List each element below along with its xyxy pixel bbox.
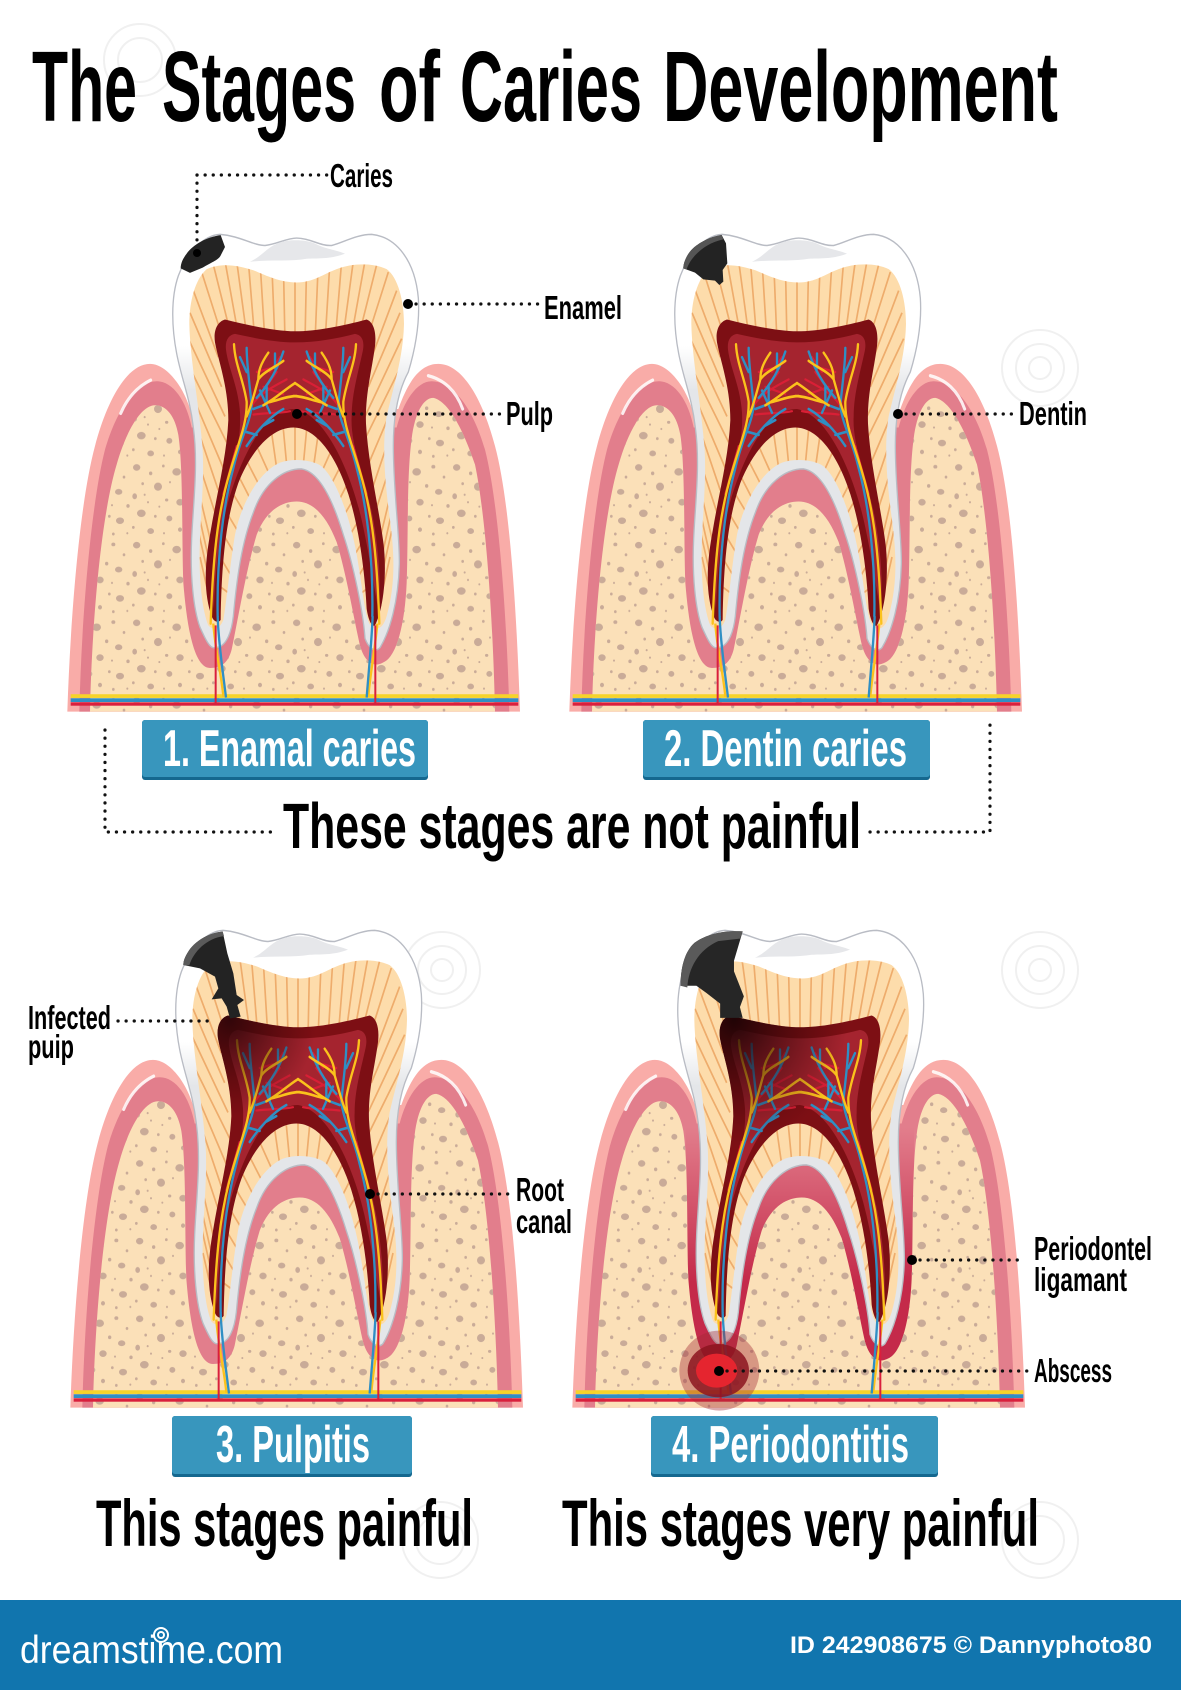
caries stage 4 bbox=[681, 931, 744, 1018]
label: infected pulp bbox=[28, 999, 213, 1065]
title: of bbox=[379, 31, 440, 143]
panel: stage 3 tooth bbox=[70, 930, 523, 1408]
caries stage 2 bbox=[683, 235, 727, 285]
title: Stages bbox=[162, 31, 356, 143]
label: enamel: Enamel bbox=[544, 289, 622, 326]
footer credit: ID 242908675 © Dannyphoto80 bbox=[790, 1632, 1152, 1659]
title: The bbox=[32, 31, 137, 143]
label: infected pulp: puip bbox=[28, 1028, 74, 1065]
abscess bbox=[679, 1331, 759, 1411]
stage label 1: 1. Enamal caries bbox=[163, 720, 416, 778]
bracket and caption: not painful: These stages are not painful bbox=[283, 790, 861, 862]
stage label 3 bbox=[172, 1416, 412, 1477]
label: pulp: Pulp bbox=[506, 395, 553, 432]
stage label 3: 3. Pulpitis bbox=[216, 1416, 370, 1474]
bracket and caption: not painful bbox=[105, 722, 990, 862]
stage label 1 bbox=[142, 720, 428, 780]
label: periodontal ligament: ligamant bbox=[1034, 1261, 1127, 1298]
caption: painful: This stages painful bbox=[96, 1486, 473, 1560]
stage label 2 bbox=[643, 720, 930, 780]
label: caries bbox=[193, 157, 393, 257]
label: root canal: canal bbox=[516, 1203, 572, 1240]
footer bar bbox=[0, 1600, 1181, 1690]
icon: footer spiral bbox=[154, 1628, 168, 1642]
label: caries: Caries bbox=[330, 157, 393, 194]
panel: stage 1 tooth bbox=[67, 234, 520, 712]
label: periodontal ligament bbox=[907, 1230, 1152, 1298]
label: dentin: Dentin bbox=[1019, 395, 1087, 432]
label: enamel bbox=[403, 289, 622, 326]
footer logo text: dreamstime.com bbox=[20, 1629, 283, 1672]
stage label 4 bbox=[651, 1416, 938, 1477]
watermark spirals bbox=[104, 24, 1078, 1578]
title: Caries bbox=[460, 31, 642, 143]
label: abscess: Abscess bbox=[1034, 1352, 1112, 1389]
stage label 2: 2. Dentin caries bbox=[664, 720, 907, 778]
panel: stage 4 tooth bbox=[572, 930, 1025, 1411]
title bbox=[32, 31, 1058, 143]
label: infected pulp: Infected bbox=[28, 999, 111, 1036]
label: abscess bbox=[714, 1352, 1112, 1389]
panel: stage 2 tooth bbox=[569, 234, 1022, 712]
label: dentin bbox=[893, 395, 1087, 432]
stage label 4: 4. Periodontitis bbox=[672, 1416, 909, 1474]
caries stage 3 bbox=[183, 932, 244, 1018]
label: root canal bbox=[365, 1171, 572, 1240]
caries spot stage 1 bbox=[181, 235, 225, 273]
label: pulp bbox=[292, 395, 553, 432]
label: root canal: Root bbox=[516, 1171, 564, 1208]
